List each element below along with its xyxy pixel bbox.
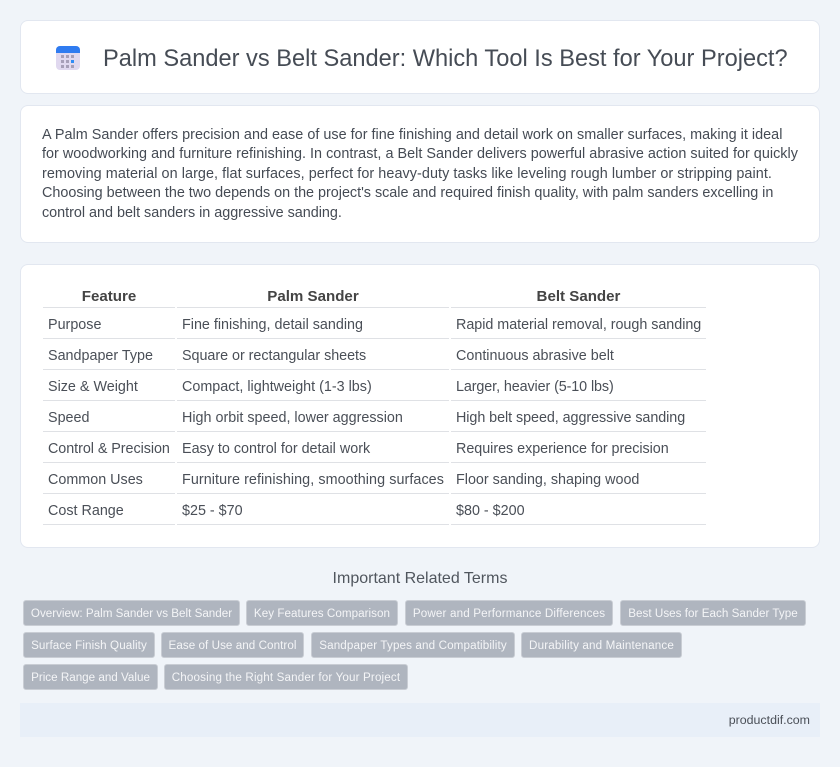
panel: title header — [20, 20, 820, 94]
table: palm sander vs belt sander: Compact, lightweight (1-3 lbs) — [182, 379, 372, 395]
footer: source: productdif.com — [729, 713, 810, 727]
table: palm sander vs belt sander: Larger, heavier (5-10 lbs) — [456, 379, 614, 395]
text block: introduction: A Palm Sander offers precision and ease of use for fine finishing and detail work on smaller surfaces, making it ideal — [42, 127, 782, 143]
footer: source — [20, 703, 820, 737]
text block: introduction — [42, 127, 798, 221]
table: palm sander vs belt sander: Furniture refinishing, smoothing surfaces — [182, 472, 444, 488]
table: palm sander vs belt sander: Requires experience for precision — [456, 441, 669, 457]
text block: introduction: removing material on large, flat surfaces, perfect for heavy-duty tasks like leveling rough lumber or stripping paint. — [42, 166, 772, 182]
table: palm sander vs belt sander: Easy to control for detail work — [182, 441, 370, 457]
table: palm sander vs belt sander: High belt speed, aggressive sanding — [456, 410, 685, 426]
tags: related terms: Price Range and Value — [31, 671, 150, 684]
table: palm sander vs belt sander: Fine finishing, detail sanding — [182, 317, 363, 333]
text block: introduction: for woodworking and furniture refinishing. In contrast, a Belt Sander delivers powerful abrasive action suited for quickly — [42, 146, 798, 162]
tags: related terms: Key Features Comparison — [254, 607, 390, 620]
tags: related terms: Overview: Palm Sander vs Belt Sander — [31, 607, 232, 620]
table: palm sander vs belt sander: Floor sanding, shaping wood — [456, 472, 639, 488]
table: palm sander vs belt sander: Rapid material removal, rough sanding — [456, 317, 701, 333]
tags: related terms: Choosing the Right Sander for Your Project — [172, 671, 400, 684]
panel: comparison table — [20, 264, 820, 548]
table: palm sander vs belt sander: Feature — [82, 288, 136, 305]
text block: introduction: Choosing between the two depends on the project's scale and required finish quality, with palm sanders excelling in — [42, 185, 773, 201]
heading: important related terms: Important Related Terms — [333, 570, 507, 587]
tags: related terms — [23, 600, 806, 690]
tags: related terms: Surface Finish Quality — [31, 639, 147, 652]
tags: related terms: Sandpaper Types and Compatibility — [319, 639, 507, 652]
table: palm sander vs belt sander: Speed — [48, 410, 89, 426]
table: palm sander vs belt sander: Belt Sander — [537, 288, 620, 305]
table: palm sander vs belt sander: $25 - $70 — [182, 503, 243, 519]
table: palm sander vs belt sander — [43, 288, 706, 525]
table: palm sander vs belt sander: Palm Sander — [267, 288, 359, 305]
title: Palm Sander vs Belt Sander: Which Tool Is Best for Your Project? — [103, 46, 788, 72]
table: palm sander vs belt sander: Common Uses — [48, 472, 143, 488]
panel: introduction text — [20, 105, 820, 243]
table: palm sander vs belt sander: Sandpaper Type — [48, 348, 153, 364]
table: palm sander vs belt sander: Purpose — [48, 317, 101, 333]
table: palm sander vs belt sander: Continuous abrasive belt — [456, 348, 614, 364]
table: palm sander vs belt sander: Cost Range — [48, 503, 124, 519]
icon: calendar — [56, 46, 80, 70]
tags: related terms: Durability and Maintenance — [529, 639, 674, 652]
tags: related terms: Best Uses for Each Sander Type — [628, 607, 798, 620]
text block: introduction: control and belt sanders in aggressive sanding. — [42, 205, 342, 221]
tags: related terms: Power and Performance Differences — [413, 607, 605, 620]
table: palm sander vs belt sander: Control & Precision — [48, 441, 170, 457]
tags: related terms: Ease of Use and Control — [168, 639, 296, 652]
table: palm sander vs belt sander: $80 - $200 — [456, 503, 525, 519]
table: palm sander vs belt sander: High orbit speed, lower aggression — [182, 410, 403, 426]
table: palm sander vs belt sander: Size & Weight — [48, 379, 138, 395]
table: palm sander vs belt sander: Square or rectangular sheets — [182, 348, 366, 364]
